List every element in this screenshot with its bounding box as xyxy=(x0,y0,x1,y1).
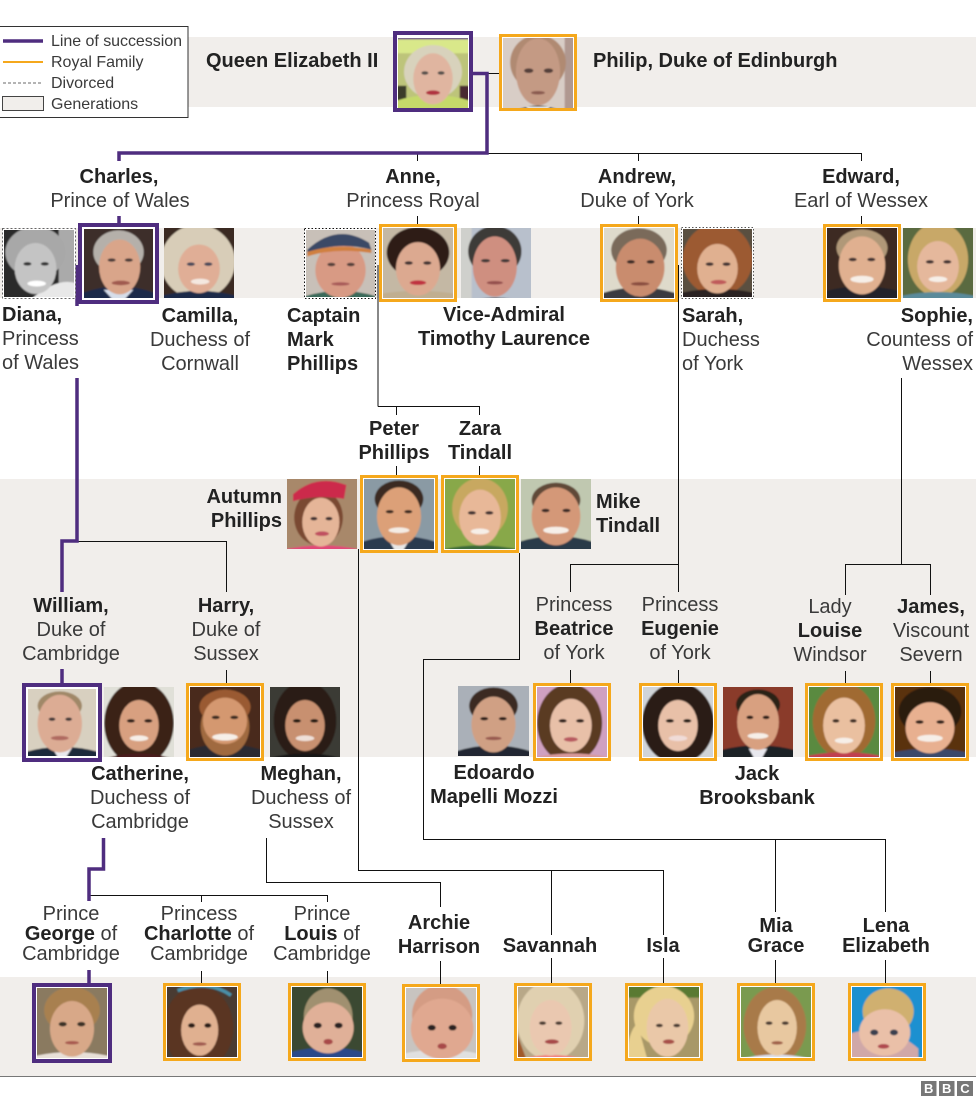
label: Diana: Princess xyxy=(2,328,79,350)
label: Autumn Phillips: Phillips xyxy=(211,510,282,532)
label: Sarah: Sarah, xyxy=(682,305,743,327)
label: Sarah: of York xyxy=(682,353,744,375)
label: Edward: Earl of Wessex xyxy=(794,190,928,212)
legend: Line of succession xyxy=(51,33,182,50)
label: Timothy Laurence: Timothy Laurence xyxy=(418,328,590,350)
photo: Charles xyxy=(78,225,159,306)
label: Meghan: Sussex xyxy=(268,811,334,833)
label: James: Viscount xyxy=(893,620,970,642)
label: Beatrice: Princess xyxy=(536,594,612,616)
label: Catherine: Catherine, xyxy=(91,763,189,785)
legend xyxy=(0,26,188,118)
label: Captain Mark Phillips: Captain xyxy=(287,305,360,327)
legend: Divorced xyxy=(51,75,114,92)
label: Autumn Phillips xyxy=(206,486,282,532)
photo: Charlotte xyxy=(161,984,243,1070)
label: Camilla: Duchess of xyxy=(150,329,250,351)
label: Peter Phillips: Phillips xyxy=(358,442,430,464)
label: Captain Mark Phillips: Phillips xyxy=(287,353,358,375)
label: Louise xyxy=(793,596,867,666)
label: William xyxy=(22,595,120,665)
label: Catherine: Cambridge xyxy=(91,811,189,833)
photo: William xyxy=(23,685,101,764)
label: Eugenie: Eugenie xyxy=(641,618,719,640)
label: Zara Tindall xyxy=(448,418,512,464)
label: Harry: Sussex xyxy=(193,643,259,665)
photo: Eugenie xyxy=(637,683,719,765)
label: Lena Elizabeth: Elizabeth xyxy=(842,935,930,957)
BBC logo: B xyxy=(924,1081,933,1096)
label: Andrew xyxy=(580,166,695,212)
BBC logo xyxy=(921,1081,973,1096)
label: Charlotte: Cambridge xyxy=(150,943,248,965)
photo: Mike xyxy=(521,479,591,549)
label: Sophie: Wessex xyxy=(902,353,973,375)
label: Timothy Laurence xyxy=(418,304,590,350)
label: Charles: Prince of Wales xyxy=(50,190,190,212)
photo: Mia xyxy=(735,984,817,1065)
label: Lena Elizabeth xyxy=(842,915,930,957)
label: Mike Tindall: Mike xyxy=(596,491,640,513)
label: James xyxy=(893,596,970,666)
label: Anne: Princess Royal xyxy=(346,190,480,212)
generation band 4 xyxy=(0,977,976,1077)
label: Mia Grace: Mia xyxy=(759,915,794,937)
label: Mia Grace xyxy=(748,915,804,957)
photo: Edoardo xyxy=(458,686,529,756)
label: Mia Grace: Grace xyxy=(748,935,804,957)
label: Louise: Lady xyxy=(808,596,852,618)
photo: Diana xyxy=(0,227,80,308)
footer rule xyxy=(0,1076,976,1078)
generation band 3 xyxy=(0,479,976,757)
label: Zara Tindall: Zara xyxy=(459,418,502,440)
photo: Louis xyxy=(286,984,368,1065)
label: James: Severn xyxy=(899,644,963,666)
label: Louise: Windsor xyxy=(793,644,867,666)
label: Louis: Prince xyxy=(294,903,350,925)
label: Captain Mark Phillips: Mark xyxy=(287,329,335,351)
label: Charles xyxy=(50,166,190,212)
label: George: Cambridge xyxy=(22,943,120,965)
photo: Beatrice xyxy=(531,684,613,765)
label: Edward: Edward, xyxy=(822,166,900,188)
label: Andrew: Andrew, xyxy=(598,166,676,188)
label: Diana: of Wales xyxy=(2,352,79,374)
label: George: Prince xyxy=(43,903,99,925)
BBC logo: B xyxy=(942,1081,951,1096)
photo: Meghan xyxy=(270,687,340,757)
photo: Louise xyxy=(803,684,885,765)
label: Charlotte xyxy=(144,903,254,965)
label: Sophie xyxy=(866,305,973,375)
photo: Zara xyxy=(439,476,521,557)
photo: Timothy Laurence xyxy=(461,228,531,298)
label: Mike Tindall xyxy=(596,491,660,537)
label: Camilla: Cornwall xyxy=(161,353,239,375)
label: Jack xyxy=(699,763,816,809)
photo: Anne xyxy=(377,225,459,306)
label: Autumn Phillips: Autumn xyxy=(206,486,282,508)
label: Eugenie: of York xyxy=(649,642,712,664)
photo: Harry xyxy=(184,684,266,765)
photo: Catherine xyxy=(104,687,174,757)
legend: Generations xyxy=(51,96,138,113)
label: Anne xyxy=(346,166,480,212)
family connector lines xyxy=(77,74,930,984)
label: Archie: Harrison xyxy=(398,936,480,958)
label: Charlotte: Princess xyxy=(161,903,237,925)
label: James: James, xyxy=(897,596,965,618)
label: Diana xyxy=(2,304,79,374)
label: Edward xyxy=(794,166,928,212)
label: Sophie: Countess of xyxy=(866,329,973,351)
label: Louis: Cambridge xyxy=(273,943,371,965)
photo: Autumn xyxy=(287,479,357,549)
label: Lena Elizabeth: Lena xyxy=(863,915,910,937)
label: Eugenie: Princess xyxy=(642,594,718,616)
photo: Andrew xyxy=(598,225,680,306)
label: Catherine xyxy=(90,763,190,833)
label: Harry xyxy=(192,595,261,665)
photo: Archie xyxy=(400,985,482,1066)
label: Charlotte: Charlotte of xyxy=(144,923,254,945)
photo: Jack xyxy=(723,687,793,757)
label: Charles: Charles, xyxy=(80,166,158,188)
label: Jack: Jack xyxy=(735,763,780,785)
label: Harry: Duke of xyxy=(192,619,261,641)
label: Edoardo: Mapelli Mozzi xyxy=(430,786,558,808)
photo: Peter xyxy=(358,476,440,557)
label: Zara Tindall: Tindall xyxy=(448,442,512,464)
photo: Queen Elizabeth II xyxy=(392,33,474,116)
label: Meghan: Duchess of xyxy=(251,787,351,809)
label: Jack: Brooksbank xyxy=(699,787,816,809)
label: Camilla xyxy=(150,305,250,375)
label: Philip: Philip, Duke of Edinburgh xyxy=(593,50,837,72)
label: George: George of xyxy=(25,923,118,945)
photo: James xyxy=(889,684,971,765)
label: Meghan xyxy=(251,763,351,833)
label: Edoardo: Edoardo xyxy=(453,762,535,784)
label: Meghan: Meghan, xyxy=(260,763,342,785)
photo: Isla xyxy=(623,984,705,1065)
photo: Sarah xyxy=(678,224,757,305)
label: Andrew: Duke of York xyxy=(580,190,695,212)
label: Peter Phillips: Peter xyxy=(369,418,419,440)
label: William: William, xyxy=(33,595,109,617)
generation band 2 xyxy=(0,228,976,298)
photo: Captain Mark Phillips xyxy=(300,227,381,307)
label: Eugenie xyxy=(641,594,719,664)
photo: George xyxy=(31,985,113,1066)
label: Camilla: Camilla, xyxy=(162,305,238,327)
label: Sophie: Sophie, xyxy=(901,305,973,327)
generation band 1 xyxy=(188,37,976,107)
label: Beatrice: of York xyxy=(543,642,606,664)
label: Louis: Louis of xyxy=(284,923,360,945)
label: Edoardo xyxy=(430,762,558,808)
label: Louise: Louise xyxy=(798,620,862,642)
label: Sarah: Duchess xyxy=(682,329,760,351)
label: Sarah xyxy=(682,305,760,375)
photo: Savannah xyxy=(512,981,594,1065)
label: Timothy Laurence: Vice-Admiral xyxy=(443,304,565,326)
label: Louis xyxy=(273,903,371,965)
label: Queen: Queen Elizabeth II xyxy=(206,50,378,72)
photo: Edward xyxy=(821,225,903,306)
label: Beatrice: Beatrice xyxy=(535,618,613,640)
label: Archie xyxy=(398,912,480,958)
label: Catherine: Duchess of xyxy=(90,787,190,809)
label: Mike Tindall: Tindall xyxy=(596,515,660,537)
label: Anne: Anne, xyxy=(385,166,441,188)
label: Captain Mark Phillips xyxy=(287,305,360,375)
label: George xyxy=(22,903,120,965)
label: Isla: Isla xyxy=(646,935,681,957)
photo: Sophie xyxy=(903,228,973,298)
line of succession xyxy=(62,74,487,984)
label: Harry: Harry, xyxy=(198,595,254,617)
label: Diana: Diana, xyxy=(2,304,62,326)
photo: Lena xyxy=(846,984,928,1065)
label: William: Duke of xyxy=(37,619,106,641)
legend: Royal Family xyxy=(51,54,143,71)
label: Savannah: Savannah xyxy=(503,935,597,957)
photo: Camilla xyxy=(164,228,234,298)
label: William: Cambridge xyxy=(22,643,120,665)
label: Archie: Archie xyxy=(408,912,470,934)
label: Peter Phillips xyxy=(358,418,430,464)
label: Beatrice xyxy=(535,594,613,664)
photo: Philip xyxy=(497,35,579,116)
BBC logo: C xyxy=(960,1081,970,1096)
